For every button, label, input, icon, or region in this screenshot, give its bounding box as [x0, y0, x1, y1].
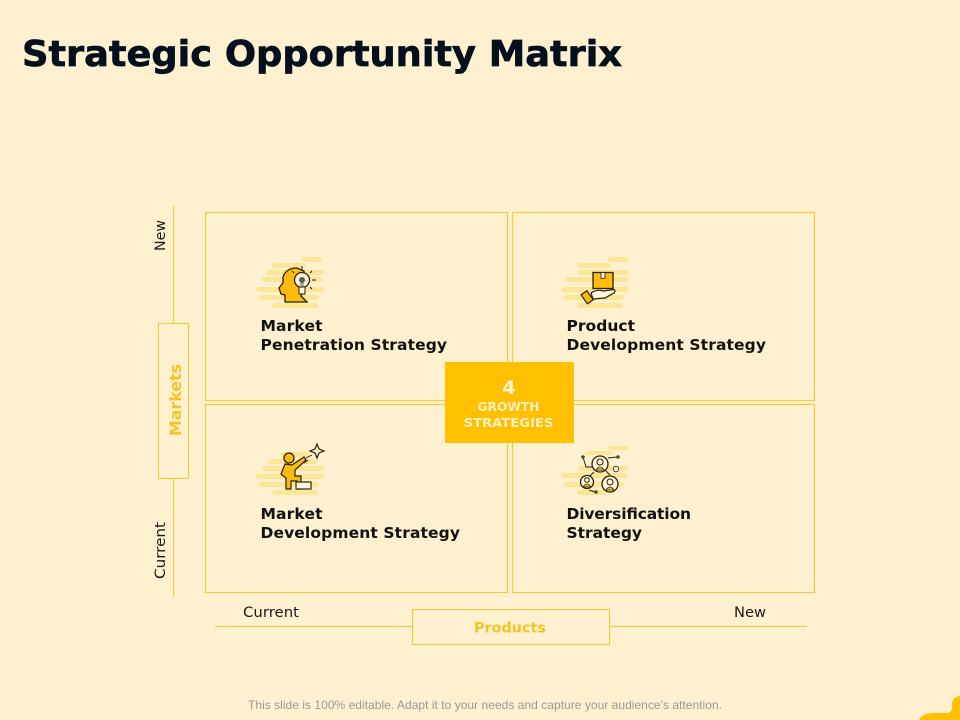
title: Strategic Opportunity Matrix	[22, 34, 622, 75]
label: market development: Market	[260, 505, 323, 523]
label: market penetration: Market	[260, 317, 323, 335]
horizontal axis: products	[215, 605, 807, 644]
horizontal axis: products: Current	[243, 605, 300, 621]
vertical axis: markets	[153, 206, 188, 597]
center badge: 4 growth strategies: STRATEGIES	[464, 415, 554, 430]
icon: hand holding box	[561, 257, 629, 308]
label: market development: Development Strategy	[260, 524, 460, 542]
icon: head with light bulb	[256, 257, 324, 308]
icon: connected people	[561, 446, 628, 495]
label: diversification: Strategy	[566, 524, 642, 542]
panel: diversification	[512, 404, 814, 592]
vertical axis: markets: Current	[153, 521, 169, 579]
corner decoration	[919, 696, 960, 720]
horizontal axis: products: New	[734, 605, 766, 621]
label: product development: Development Strategy	[566, 336, 766, 354]
panel: market penetration	[206, 212, 508, 400]
horizontal axis: products: Products	[474, 620, 546, 636]
label: product development: Product	[566, 317, 636, 335]
vertical axis: markets: Markets	[166, 364, 185, 436]
footer note: This slide is 100% editable. Adapt it to your needs and capture your audience's attention.	[248, 698, 722, 712]
panel: market development	[206, 404, 508, 592]
icon: person reaching for star	[256, 444, 324, 495]
center badge: 4 growth strategies	[445, 362, 574, 443]
center badge: 4 growth strategies: GROWTH	[478, 399, 540, 414]
panel: product development	[512, 212, 814, 400]
label: diversification: Diversification	[566, 505, 691, 523]
vertical axis: markets: New	[153, 220, 169, 251]
center badge: 4 growth strategies: 4	[502, 377, 516, 399]
label: market penetration: Penetration Strategy	[260, 336, 447, 354]
